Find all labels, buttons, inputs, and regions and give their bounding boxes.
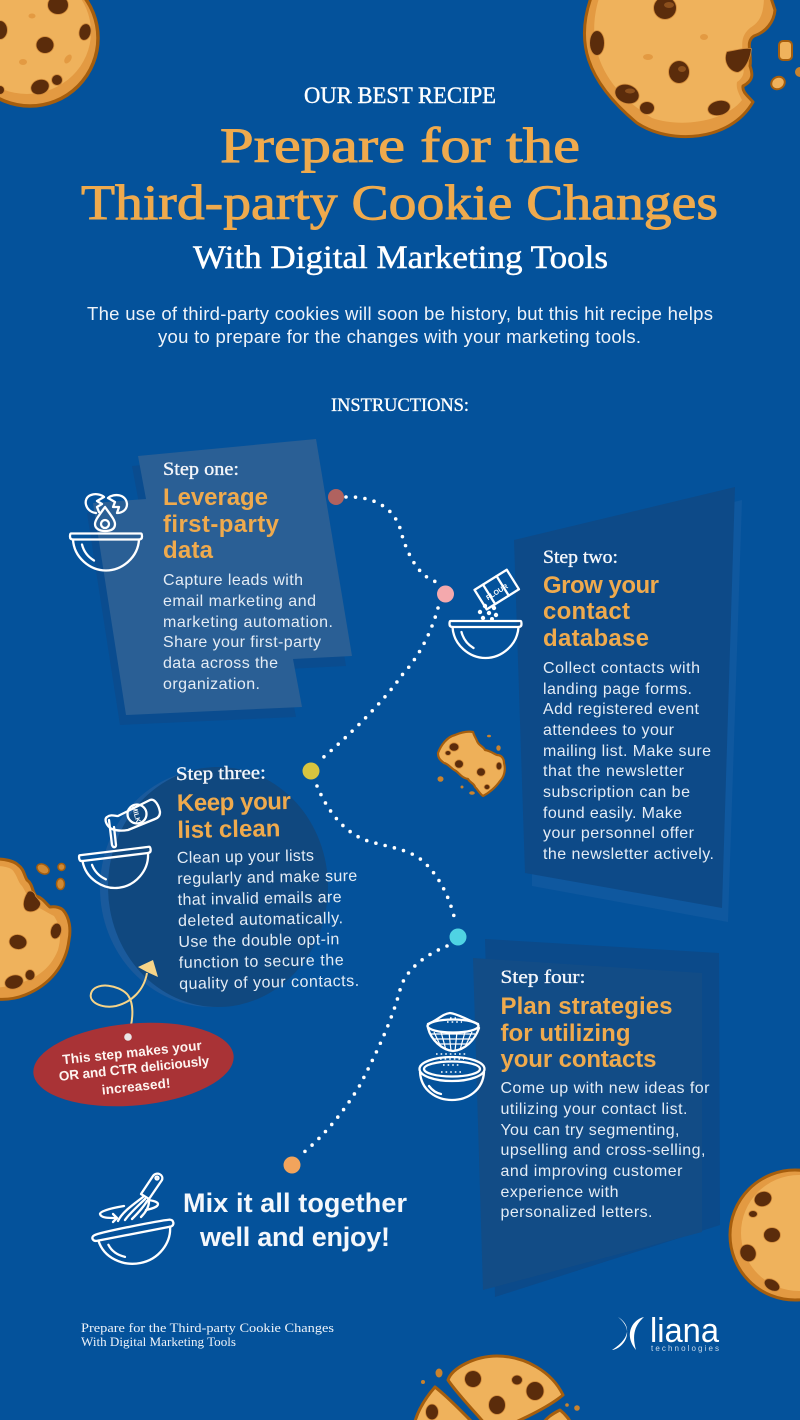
heading: step four: Step four: [500, 967, 586, 988]
subtitle: With Digital Marketing Tools [193, 240, 608, 276]
text: step three body [177, 847, 359, 993]
icon: bowl with milk bottle [79, 800, 160, 892]
route node: cyan [450, 928, 466, 946]
icon: whisk in bowl [92, 1174, 180, 1271]
icon: sieve over bowl [420, 1013, 484, 1100]
text: step two body: Collect contacts with [543, 660, 700, 677]
logo: liana technologies: technologies [651, 1344, 719, 1353]
text: step one body [163, 572, 333, 693]
text: step two body [543, 660, 714, 863]
closing message: Mix it all together [183, 1188, 407, 1218]
cookie: left with bite [0, 859, 70, 999]
text: step two body: mailing list. Make sure [543, 743, 711, 760]
cookie: middle bitten [438, 732, 505, 796]
heading: step one [163, 459, 280, 564]
text: step two body: found easily. Make [543, 805, 682, 822]
cookie: top right with bite [584, 0, 800, 137]
route node: pink [437, 586, 454, 602]
heading: step one: Leverage [163, 484, 268, 511]
heading: step one: data [163, 537, 214, 564]
text: step three body: function to secure the [179, 952, 344, 972]
heading: step four [500, 967, 672, 1073]
route node: red [328, 489, 344, 505]
callout: red bubble: increased! [101, 1075, 171, 1098]
route node: yellow [302, 762, 320, 780]
callout: red bubble: OR and CTR deliciously [58, 1053, 210, 1084]
panel: step three [100, 767, 328, 1007]
icon: bowl with milk bottle: MILK [130, 805, 141, 824]
title [81, 117, 718, 230]
text: step two body: your personnel offer [543, 825, 695, 842]
heading: step three: Keep your [177, 788, 291, 817]
text: step three body: regularly and make sure [177, 868, 358, 888]
intro paragraph [87, 303, 713, 347]
text: step three body: that invalid emails are [178, 889, 342, 909]
text: step four body: Come up with new ideas for [500, 1080, 710, 1097]
heading: step four: your contacts [500, 1046, 656, 1073]
icon: bowl with flour [450, 570, 522, 658]
heading: step three [176, 762, 292, 844]
footer title: Prepare for the Third-party Cookie Changes [81, 1321, 334, 1335]
text: step four body: experience with [500, 1184, 618, 1201]
text: step four body: You can try segmenting, [500, 1122, 680, 1139]
text: step two body: Add registered event [543, 701, 700, 718]
panel: step one [87, 439, 352, 725]
heading: step two: database [543, 625, 649, 652]
text: step three body: Use the double opt-in [178, 931, 340, 951]
callout: red bubble [30, 1015, 237, 1114]
text: step four body [500, 1080, 710, 1221]
text: step two body: the newsletter actively. [543, 846, 714, 863]
heading: step four: Plan strategies [500, 993, 672, 1020]
cookie: bottom broken [414, 1356, 580, 1420]
heading: step four: for utilizing [500, 1020, 630, 1047]
title: Third-party Cookie Changes [81, 174, 718, 230]
logo: liana technologies [612, 1312, 719, 1353]
heading: step one: Step one: [163, 459, 239, 480]
text: step one body: organization. [163, 676, 260, 693]
route node: orange [284, 1156, 300, 1174]
footer title [81, 1321, 334, 1349]
callout: arrow [91, 960, 158, 1037]
text: step three body: deleted automatically. [178, 910, 343, 930]
text: step three body: quality of your contacts. [179, 973, 359, 993]
heading: step three: list clean [177, 815, 281, 844]
text: step four body: upselling and cross-selling, [500, 1142, 706, 1159]
panel: step four [473, 939, 720, 1297]
text: step two body: attendees to your [543, 722, 675, 739]
text: step two body: landing page forms. [543, 681, 692, 698]
eyebrow: OUR BEST RECIPE [304, 83, 496, 108]
heading: step three: Step three: [176, 762, 266, 785]
text: step four body: and improving customer [500, 1163, 683, 1180]
icon: bowl with cracked egg [70, 494, 142, 570]
text: step one body: email marketing and [163, 593, 316, 610]
callout: red bubble: This step makes your [62, 1038, 203, 1067]
heading: step one: first-party [163, 511, 280, 538]
heading: step two [543, 547, 659, 652]
logo: liana technologies: liana [650, 1312, 719, 1350]
closing message: well and enjoy! [199, 1222, 390, 1252]
title: Prepare for the [220, 117, 580, 173]
text: step two body: that the newsletter [543, 763, 685, 780]
heading: step two: Step two: [543, 547, 618, 568]
closing message [183, 1188, 407, 1252]
text: step four body: utilizing your contact list. [500, 1101, 688, 1118]
dotted route [303, 497, 455, 1153]
icon: bowl with flour: FLOUR [485, 583, 510, 602]
instructions label: INSTRUCTIONS: [331, 395, 469, 416]
text: step one body: data across the [163, 655, 278, 672]
cookie: right [730, 1170, 800, 1300]
intro paragraph: The use of third-party cookies will soon be history, but this hit recipe helps [87, 303, 713, 324]
text: step one body: Capture leads with [163, 572, 303, 589]
text: step one body: marketing automation. [163, 614, 333, 631]
cookie: top left [0, 0, 98, 106]
panel: step two [514, 487, 742, 922]
heading: step two: contact [543, 598, 630, 625]
footer title: With Digital Marketing Tools [81, 1335, 236, 1349]
text: step three body: Clean up your lists [177, 848, 314, 867]
heading: step two: Grow your [543, 572, 659, 599]
text: step four body: personalized letters. [500, 1204, 652, 1221]
intro paragraph: you to prepare for the changes with your marketing tools. [158, 326, 641, 347]
text: step one body: Share your first-party [163, 634, 321, 651]
text: step two body: subscription can be [543, 784, 690, 801]
